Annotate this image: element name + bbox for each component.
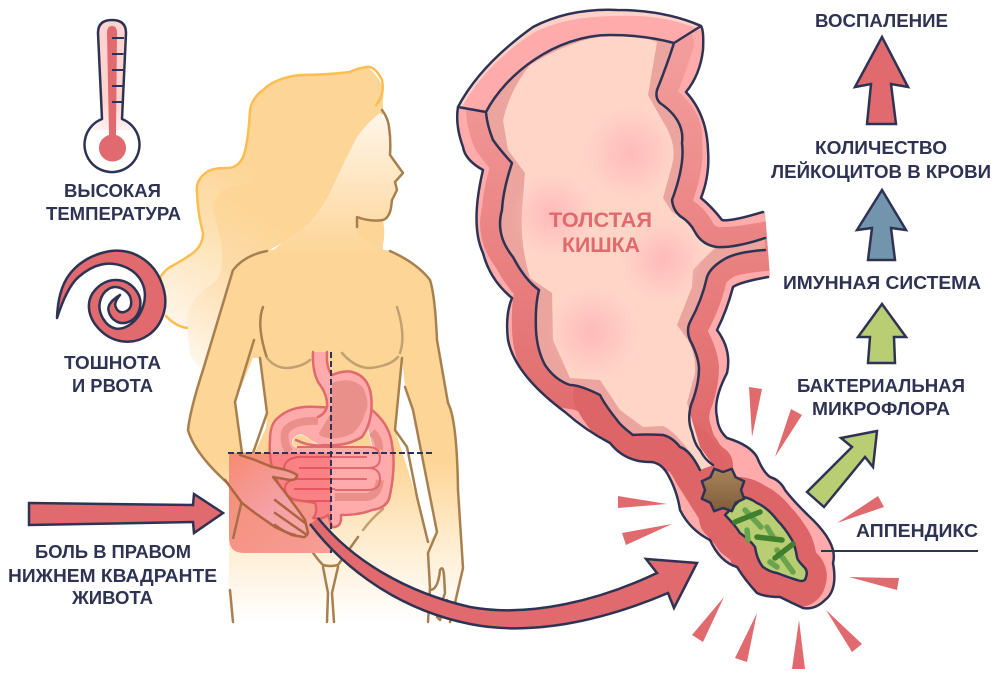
chest lines bbox=[267, 307, 402, 530]
gap between arm and torso, right bbox=[395, 358, 437, 542]
colon top cut bbox=[458, 10, 701, 112]
colon wall bbox=[457, 10, 834, 608]
icon: nausea spiral bbox=[57, 251, 165, 342]
hair core bbox=[186, 67, 383, 370]
text: pain location: НИЖНЕМ КВАДРАНТЕ bbox=[8, 566, 217, 586]
curved arrow to appendix bbox=[310, 518, 697, 628]
text: high temperature: ТЕМПЕРАТУРА bbox=[46, 204, 181, 224]
hair outline bbox=[160, 67, 383, 328]
intestine loops bbox=[284, 447, 380, 501]
arrow: pain pointer bbox=[29, 494, 223, 533]
hair back layer bbox=[160, 67, 383, 370]
colon lumen bbox=[503, 35, 715, 470]
text: pain location: ЖИВОТА bbox=[71, 588, 153, 608]
text: bacterial flora bbox=[797, 376, 965, 419]
text: nausea and vomiting: ТОШНОТА bbox=[64, 353, 161, 373]
arrow: bacterial flora up-right bbox=[807, 431, 877, 507]
text: large intestine: КИШКА bbox=[562, 233, 640, 257]
text: immune system: ИМУННАЯ СИСТЕМА bbox=[783, 273, 981, 293]
hip line bbox=[233, 500, 242, 539]
colon and appendix bbox=[457, 10, 834, 608]
arrow: green up bbox=[858, 304, 906, 363]
skin gap below stomach bbox=[292, 430, 372, 447]
text: white blood cell count bbox=[771, 138, 991, 182]
inflamed part of intestine bbox=[270, 453, 331, 523]
colon outline bbox=[457, 10, 834, 608]
text: high temperature: ВЫСОКАЯ bbox=[64, 181, 161, 201]
stomach inner shade bbox=[319, 380, 368, 438]
body silhouette bbox=[188, 240, 463, 622]
fecal stone bbox=[702, 469, 744, 511]
face and neck bbox=[270, 113, 403, 252]
text: nausea and vomiting bbox=[64, 353, 161, 396]
appendix lumen with bacteria bbox=[725, 497, 807, 581]
text: white blood cell count: ЛЕЙКОЦИТОВ В КРОВИ bbox=[771, 161, 991, 182]
text: white blood cell count: КОЛИЧЕСТВО bbox=[815, 138, 947, 158]
icon: thermometer bbox=[84, 20, 140, 172]
intestines bbox=[270, 407, 394, 527]
body outline bbox=[188, 110, 463, 622]
text: inflammation: ВОСПАЛЕНИЕ bbox=[815, 11, 948, 31]
label: appendix: АППЕНДИКС bbox=[856, 521, 978, 541]
gap between arm and torso, left bbox=[235, 358, 267, 452]
neck shadow bbox=[357, 218, 384, 248]
pain rays around appendix bbox=[618, 387, 899, 669]
text: pain location bbox=[8, 542, 217, 608]
text: bacterial flora: МИКРОФЛОРА bbox=[812, 399, 950, 419]
text: high temperature bbox=[46, 181, 181, 224]
arrow: blue up bbox=[857, 190, 906, 260]
hand on abdomen bbox=[225, 455, 308, 537]
digestive tract bbox=[265, 352, 394, 533]
text: bacterial flora: БАКТЕРИАЛЬНАЯ bbox=[797, 376, 965, 396]
text: pain location: БОЛЬ В ПРАВОМ bbox=[35, 542, 191, 562]
inflammation spots bbox=[510, 107, 705, 379]
text: large intestine bbox=[549, 208, 652, 257]
stomach and esophagus bbox=[313, 352, 372, 445]
right lower quadrant highlight bbox=[229, 453, 331, 553]
quadrant crosshair bbox=[228, 352, 433, 553]
text: nausea and vomiting: И РВОТА bbox=[72, 376, 153, 396]
arrow: red up bbox=[855, 37, 908, 124]
text: large intestine: ТОЛСТАЯ bbox=[549, 208, 652, 232]
colon muscle band bbox=[486, 35, 804, 584]
woman figure bbox=[160, 67, 463, 622]
colon lumen shade bbox=[486, 35, 765, 470]
